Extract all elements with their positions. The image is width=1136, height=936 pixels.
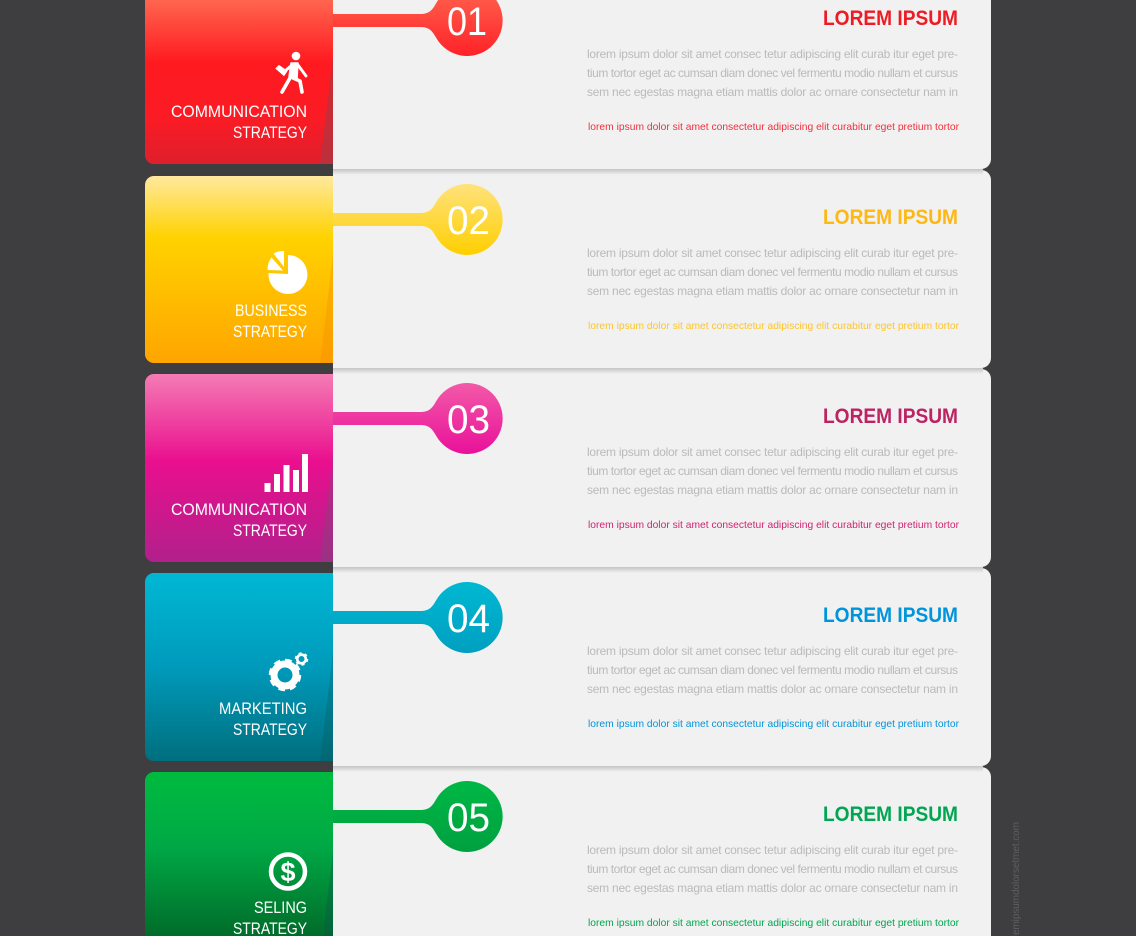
card shade	[320, 55, 333, 164]
tagline: lorem ipsum dolor sit amet consectetur adipiscing elit curabitur eget pretium tortor	[588, 121, 959, 133]
label: STRATEGY	[233, 521, 307, 540]
body text: lorem ipsum dolor sit amet consec tetur adipiscing elit curab itur eget pre-	[587, 843, 958, 857]
heading: LOREM IPSUM	[823, 405, 958, 428]
label: STRATEGY	[233, 322, 307, 341]
number: 03	[447, 398, 490, 442]
body text: lorem ipsum dolor sit amet consec tetur adipiscing elit curab itur eget pre-	[587, 445, 958, 459]
body text: sem nec egestas magna etiam mattis dolor ac ornare consectetur nam in	[587, 85, 958, 99]
card: blue	[145, 573, 333, 761]
content panel	[333, 170, 991, 368]
heading: LOREM IPSUM	[823, 604, 958, 627]
panel shadow	[333, 368, 983, 374]
body text: sem nec egestas magna etiam mattis dolor ac ornare consectetur nam in	[587, 881, 958, 895]
body text: tium tortor eget ac cumsan diam donec vel fermentu modio nullam et cursus	[587, 265, 958, 279]
number: 01	[447, 0, 487, 44]
panel shadow	[333, 567, 983, 573]
content panel	[333, 767, 991, 936]
icon: dollar coin: $	[280, 857, 296, 887]
icon: walking person with briefcase	[276, 52, 306, 92]
content panel	[333, 369, 991, 567]
body text: tium tortor eget ac cumsan diam donec vel fermentu modio nullam et cursus	[587, 862, 958, 876]
label: BUSINESS	[235, 301, 307, 320]
body text: lorem ipsum dolor sit amet consec tetur adipiscing elit curab itur eget pre-	[587, 47, 958, 61]
panel: row 5 selling strategy	[145, 767, 991, 936]
card shade	[320, 453, 333, 562]
heading: LOREM IPSUM	[823, 803, 958, 826]
body text	[587, 445, 958, 497]
icon: gears	[270, 653, 308, 690]
body text: sem nec egestas magna etiam mattis dolor ac ornare consectetur nam in	[587, 483, 958, 497]
panel shadow	[333, 169, 983, 175]
body text: tium tortor eget ac cumsan diam donec vel fermentu modio nullam et cursus	[587, 663, 958, 677]
body text: sem nec egestas magna etiam mattis dolor ac ornare consectetur nam in	[587, 682, 958, 696]
label: SELING	[254, 898, 307, 917]
label: STRATEGY	[233, 123, 307, 142]
panel: row 3 communication strategy	[145, 369, 991, 573]
tagline: lorem ipsum dolor sit amet consectetur adipiscing elit curabitur eget pretium tortor	[588, 320, 959, 332]
panel: row 4 marketing strategy	[145, 568, 991, 772]
connector and number badge	[333, 184, 503, 255]
card: green	[145, 772, 333, 936]
number: 05	[447, 796, 490, 840]
body text: sem nec egestas magna etiam mattis dolor ac ornare consectetur nam in	[587, 284, 958, 298]
connector and number badge	[333, 383, 503, 454]
heading: LOREM IPSUM	[823, 206, 958, 229]
card shade	[320, 254, 333, 363]
connector and number badge	[333, 582, 503, 653]
label: STRATEGY	[233, 720, 307, 739]
card shade	[320, 851, 333, 936]
tagline: lorem ipsum dolor sit amet consectetur adipiscing elit curabitur eget pretium tortor	[588, 718, 959, 730]
panel: row 1 communication strategy	[145, 0, 991, 175]
panel shadow	[333, 766, 983, 772]
label: COMMUNICATION	[171, 500, 307, 519]
tagline: lorem ipsum dolor sit amet consectetur adipiscing elit curabitur eget pretium tortor	[588, 519, 959, 531]
body text	[587, 843, 958, 895]
content panel	[333, 568, 991, 766]
content panel	[333, 0, 991, 169]
body text: lorem ipsum dolor sit amet consec tetur adipiscing elit curab itur eget pre-	[587, 644, 958, 658]
card: yellow	[145, 176, 333, 363]
number: 04	[447, 597, 490, 641]
body text: tium tortor eget ac cumsan diam donec vel fermentu modio nullam et cursus	[587, 464, 958, 478]
card: red	[145, 0, 333, 164]
icon: dollar coin	[271, 854, 305, 888]
panel: row 2 business strategy	[145, 170, 991, 374]
icon: pie chart	[267, 251, 307, 294]
body text	[587, 246, 958, 298]
card: pink	[145, 374, 333, 562]
connector and number badge	[333, 781, 503, 852]
label: MARKETING	[219, 699, 307, 718]
icon: rising bars	[264, 454, 308, 492]
connector and number badge	[333, 0, 503, 56]
body text: tium tortor eget ac cumsan diam donec vel fermentu modio nullam et cursus	[587, 66, 958, 80]
label: COMMUNICATION	[171, 102, 307, 121]
number: 02	[447, 199, 490, 243]
tagline: lorem ipsum dolor sit amet consectetur adipiscing elit curabitur eget pretium tortor	[588, 917, 959, 929]
body text	[587, 47, 958, 99]
body text: lorem ipsum dolor sit amet consec tetur adipiscing elit curab itur eget pre-	[587, 246, 958, 260]
heading: LOREM IPSUM	[823, 7, 958, 30]
body text	[587, 644, 958, 696]
card shade	[320, 652, 333, 761]
